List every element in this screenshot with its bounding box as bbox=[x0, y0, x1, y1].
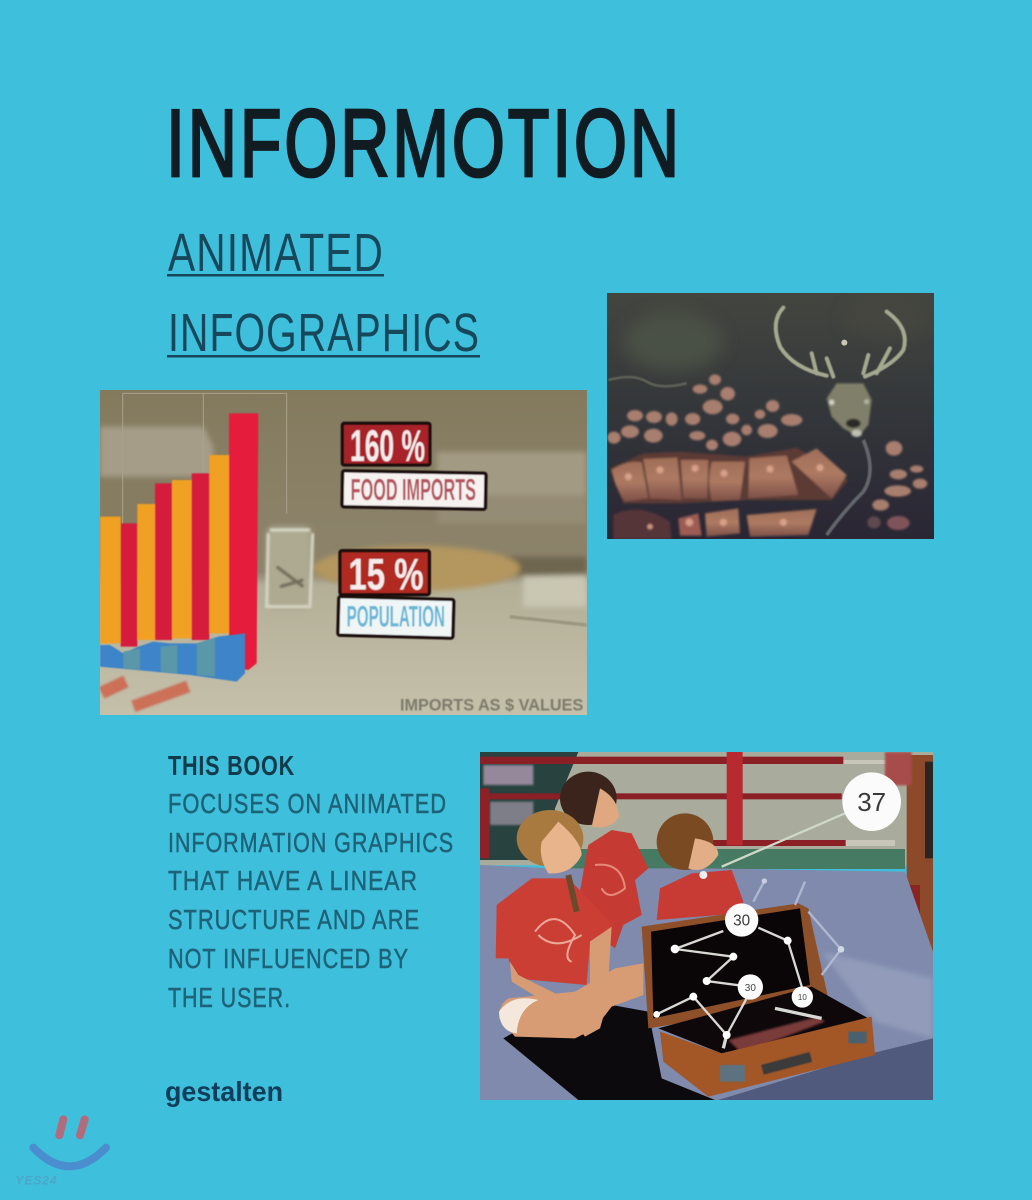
case interior bbox=[658, 987, 868, 1053]
stag neck outline bbox=[827, 440, 870, 535]
table and wall background bbox=[100, 390, 587, 715]
right post bbox=[885, 752, 933, 952]
blurred room details bbox=[100, 427, 587, 610]
callout: 15% population: 15 % bbox=[348, 551, 424, 600]
caption: imports as values: IMPORTS AS $ VALUES bbox=[400, 696, 583, 715]
smiley mouth bbox=[33, 1148, 106, 1166]
suitcase bbox=[642, 903, 875, 1097]
tee shirt bbox=[496, 878, 613, 985]
antlers bbox=[776, 308, 905, 377]
open lid bbox=[642, 903, 828, 1028]
stag head bbox=[827, 383, 872, 437]
shirt print of back child bbox=[595, 865, 625, 895]
callout: 160% food imports: 160 % bbox=[350, 422, 425, 471]
case side and front bbox=[660, 1017, 875, 1097]
number bubble 37 bbox=[842, 772, 901, 831]
number bubble 30 bbox=[725, 903, 758, 937]
foliage haze bbox=[625, 314, 722, 373]
hair bbox=[517, 810, 583, 867]
case contents bbox=[728, 1017, 825, 1053]
number bubble 37: 37 bbox=[857, 787, 886, 817]
black mat bbox=[503, 998, 715, 1100]
bars bbox=[100, 413, 258, 670]
posters bbox=[483, 765, 533, 825]
antler sparkle bbox=[841, 340, 847, 346]
green floor strip bbox=[552, 849, 905, 869]
arm bbox=[510, 927, 612, 1037]
network nodes bbox=[653, 871, 844, 1039]
callout: 15% population bbox=[338, 551, 454, 638]
case stickers bbox=[720, 1032, 867, 1082]
gym wall bbox=[480, 752, 933, 865]
subtitle: animated infographics: INFOGRAPHICS bbox=[168, 303, 480, 363]
subtitle: animated infographics: ANIMATED bbox=[168, 223, 384, 283]
number bubble small: 30 bbox=[745, 983, 756, 994]
floor shadow bbox=[718, 1038, 933, 1100]
photo: children with suitcase bbox=[480, 752, 933, 1100]
description lines: THAT HAVE A LINEAR bbox=[168, 865, 418, 896]
face bbox=[541, 822, 582, 873]
floor highlight bbox=[822, 952, 933, 1038]
red ring ropes and post bbox=[480, 752, 846, 858]
network lines bbox=[657, 813, 845, 1048]
tree branch bbox=[608, 377, 687, 386]
table edge paper bbox=[510, 617, 587, 625]
dark forest background bbox=[607, 293, 934, 539]
subtitle: animated infographics bbox=[167, 223, 480, 363]
callout: 15% population: POPULATION bbox=[347, 601, 445, 634]
blue-grey floor bbox=[480, 865, 933, 1100]
description lines: STRUCTURE AND ARE bbox=[168, 904, 420, 935]
shorts bbox=[499, 998, 538, 1033]
smiley eyes bbox=[59, 1119, 85, 1135]
blue front bars bbox=[100, 633, 245, 682]
heading: this book: THIS BOOK bbox=[168, 750, 295, 781]
dark left wall with posters bbox=[480, 752, 578, 860]
callout: 160% food imports bbox=[342, 422, 486, 509]
shirt print bbox=[535, 919, 582, 962]
upper scattered stones bbox=[607, 374, 927, 530]
number bubble tiny bbox=[792, 986, 813, 1008]
large stone body of the stag bbox=[610, 448, 848, 539]
glass bbox=[267, 530, 313, 607]
description lines: INFORMATION GRAPHICS bbox=[168, 827, 454, 858]
axis labels bbox=[99, 676, 190, 712]
book description text bbox=[168, 750, 454, 1013]
child on the right bbox=[657, 813, 743, 920]
photo: stag with stones bbox=[607, 293, 934, 539]
stone highlights bbox=[625, 464, 824, 530]
thin glass outlines bbox=[122, 392, 288, 524]
number bubble small bbox=[738, 974, 763, 1000]
legs bbox=[499, 963, 643, 1038]
publisher logo: gestalten: gestalten bbox=[165, 1076, 283, 1107]
title: INFORMOTION bbox=[166, 90, 682, 197]
callout: 160% food imports: FOOD IMPORTS bbox=[351, 473, 476, 507]
lid lining bbox=[651, 908, 810, 1018]
braid bbox=[568, 875, 577, 912]
child at the back bbox=[560, 772, 648, 948]
child on the left bbox=[496, 810, 643, 1038]
description lines: THE USER. bbox=[168, 982, 291, 1013]
ropes pale sections bbox=[843, 760, 895, 846]
photo: bar chart on dining table bbox=[99, 390, 587, 715]
description lines: FOCUSES ON ANIMATED bbox=[168, 788, 447, 819]
description lines bbox=[168, 788, 454, 1013]
number bubble 30: 30 bbox=[733, 913, 750, 930]
description lines: NOT INFLUENCED BY bbox=[168, 943, 409, 974]
watermark text: YES24 bbox=[15, 1174, 58, 1188]
watermark smiley bbox=[15, 1119, 106, 1188]
number bubble tiny: 10 bbox=[798, 993, 807, 1002]
